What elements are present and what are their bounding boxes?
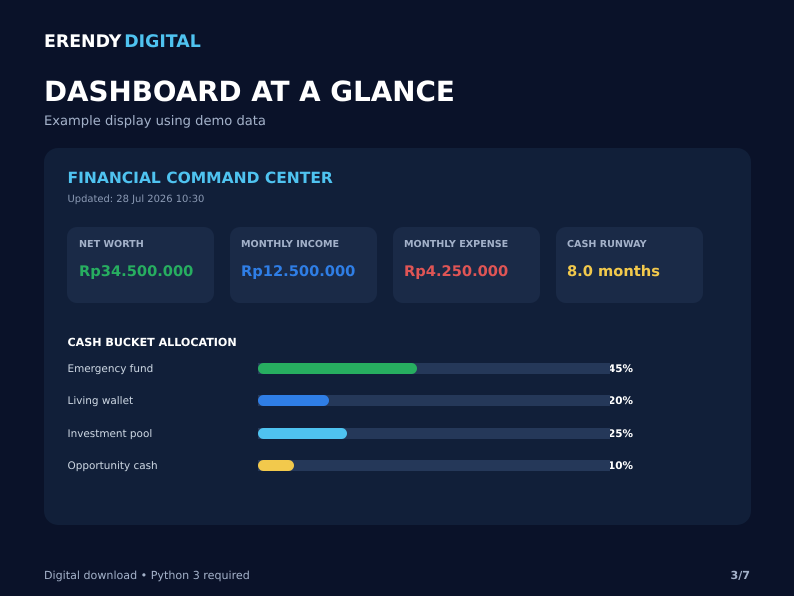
KPI card: cash runway — [556, 227, 703, 303]
KPI card: cash runway: 8.0 months — [567, 262, 660, 280]
KPI card: net worth — [67, 227, 214, 303]
footer note: Digital download • Python 3 required — [44, 568, 250, 582]
KPI card: monthly income — [230, 227, 377, 303]
bar row: living wallet — [68, 395, 633, 407]
KPI card: net worth: NET WORTH — [79, 238, 144, 250]
bar row: opportunity cash: Opportunity cash — [68, 460, 158, 472]
KPI card: net worth: Rp34.500.000 — [79, 262, 193, 280]
bar row: opportunity cash — [68, 460, 633, 472]
bar row: investment pool: 25% — [608, 428, 633, 440]
subtitle: Example display using demo data — [44, 114, 266, 129]
KPI card: monthly expense: Rp4.250.000 — [404, 262, 508, 280]
title: DASHBOARD AT A GLANCE — [44, 75, 455, 108]
bar row: living wallet: Living wallet — [68, 395, 133, 407]
KPI card: monthly income: MONTHLY INCOME — [241, 238, 339, 250]
updated timestamp: Updated: 28 Jul 2026 10:30 — [68, 194, 204, 204]
bar row: opportunity cash: 10% — [608, 460, 633, 472]
section heading: CASH BUCKET ALLOCATION — [68, 336, 237, 348]
KPI card: monthly expense — [393, 227, 540, 303]
KPI card: monthly expense: MONTHLY EXPENSE — [404, 238, 508, 250]
bar row: emergency fund: Emergency fund — [68, 362, 153, 374]
bar row: emergency fund: 45% — [608, 362, 633, 374]
bar row: living wallet: 20% — [608, 395, 633, 407]
bar row: emergency fund — [68, 362, 633, 374]
KPI card: monthly income: Rp12.500.000 — [241, 262, 355, 280]
bar row: investment pool: Investment pool — [68, 428, 152, 440]
KPI card: cash runway: CASH RUNWAY — [567, 238, 647, 250]
panel heading: FINANCIAL COMMAND CENTER — [68, 169, 333, 187]
panel: financial command center — [44, 148, 751, 525]
page number: 3/7 — [730, 568, 750, 582]
logo: ERENDYDIGITAL — [44, 32, 201, 52]
bar row: investment pool — [68, 428, 633, 440]
